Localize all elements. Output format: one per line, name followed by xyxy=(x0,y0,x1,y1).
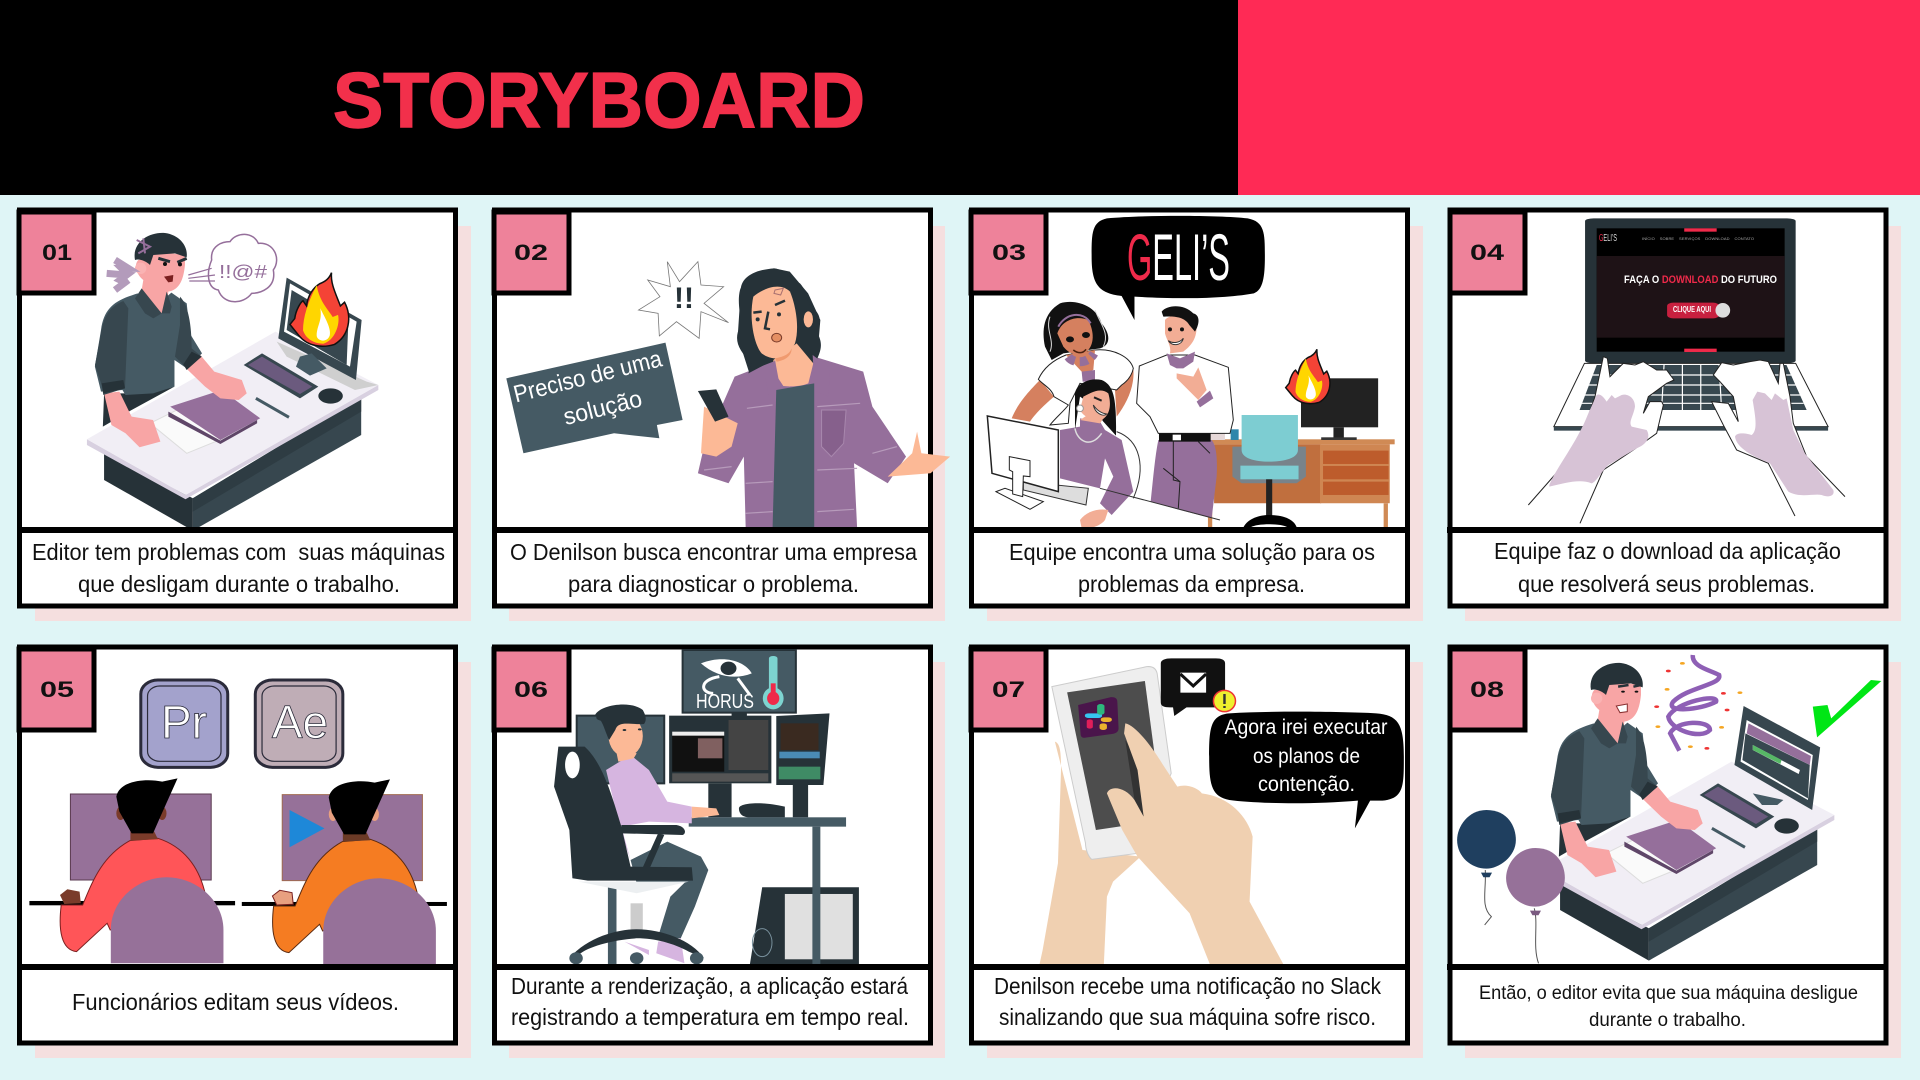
panel shadow xyxy=(987,226,1423,621)
speech balloon text: solução xyxy=(561,385,645,431)
header: red block xyxy=(1238,0,1920,195)
caption 03: Equipe encontra uma solução para os xyxy=(1009,539,1375,565)
logo text in speech bubble: GELI’S xyxy=(1127,220,1230,294)
icon: Premiere: Pr xyxy=(161,696,207,748)
badge 07 xyxy=(971,649,1046,730)
caption divider xyxy=(969,527,1410,533)
badge 03: 03 xyxy=(992,240,1026,265)
badge 07: 07 xyxy=(992,677,1025,702)
panel shadow xyxy=(1465,226,1901,621)
caption 06: registrando a temperatura em tempo real. xyxy=(511,1004,909,1030)
caption 04: que resolverá seus problemas. xyxy=(1518,571,1815,597)
badge 01: 01 xyxy=(42,240,72,265)
badge 03 xyxy=(971,212,1046,293)
speech balloon text xyxy=(511,345,674,441)
badge 08 xyxy=(1450,649,1525,730)
panel: 03 xyxy=(969,210,1423,621)
caption 07: sinalizando que sua máquina sofre risco. xyxy=(999,1004,1376,1030)
caption 07 xyxy=(994,973,1381,1030)
panel: 01 xyxy=(17,210,471,621)
panel frame xyxy=(972,210,1408,606)
caption divider xyxy=(492,964,933,970)
speech bubble text: contenção. xyxy=(1258,773,1355,796)
illustration: hands holding phone with notification xyxy=(1040,658,1404,964)
speech bubble text: Agora irei executar xyxy=(1224,716,1388,739)
caption 04: Equipe faz o download da aplicação xyxy=(1494,538,1841,564)
caption 06 xyxy=(511,973,909,1030)
caption 02: O Denilson busca encontrar uma empresa xyxy=(510,539,917,565)
title: STORYBOARD xyxy=(333,56,865,144)
panel: 02 xyxy=(492,210,950,621)
caption 02: para diagnosticar o problema. xyxy=(568,571,859,597)
laptop screen website: GELI’S xyxy=(1599,233,1617,244)
speech balloon text: Preciso de uma xyxy=(511,345,665,408)
caption 01: Editor tem problemas com suas máquinas xyxy=(32,539,445,565)
caption 08: Então, o editor evita que sua máquina desligue xyxy=(1479,982,1858,1004)
caption 06: Durante a renderização, a aplicação estará xyxy=(511,973,908,999)
illustration: monitor, balloons, confetti, check xyxy=(1457,655,1881,963)
exclamation burst text: !! xyxy=(674,282,694,315)
panel frame xyxy=(494,210,930,606)
caption 01 xyxy=(32,539,445,597)
panel: 06 xyxy=(492,647,945,1058)
illustration: hands on laptop xyxy=(1528,218,1845,523)
caption divider xyxy=(492,527,933,533)
caption 05: Funcionários editam seus vídeos. xyxy=(72,989,399,1015)
caption 03 xyxy=(1009,539,1375,597)
badge 05: 05 xyxy=(40,677,74,702)
illustration: Denilson with phone xyxy=(506,262,950,527)
logo text: Horus: HORUS xyxy=(696,691,754,713)
panel: 08 xyxy=(1447,647,1901,1058)
badge 02: 02 xyxy=(514,240,548,265)
caption divider xyxy=(17,964,458,970)
panel frame xyxy=(1450,210,1886,606)
panel shadow xyxy=(35,226,471,621)
panel frame xyxy=(20,210,456,606)
panel frame xyxy=(20,647,456,1043)
laptop screen website: FAÇA O DOWNLOAD DO FUTURO xyxy=(1624,274,1777,286)
panel frame xyxy=(972,647,1408,1043)
speech bubble text xyxy=(1224,716,1388,796)
panel: 07 xyxy=(969,647,1423,1058)
caption 04 xyxy=(1494,538,1841,597)
panel frame xyxy=(494,647,930,1043)
badge 02 xyxy=(494,212,569,293)
illustration: editor relaxed at desk xyxy=(1543,663,1834,961)
badge 01 xyxy=(19,212,94,293)
speech bubble text: os planos de xyxy=(1253,745,1360,768)
panel shadow xyxy=(1465,662,1901,1058)
illustration: two employees editing xyxy=(29,680,447,964)
caption divider xyxy=(17,527,458,533)
caption divider xyxy=(969,964,1410,970)
header: black band xyxy=(0,0,1238,195)
illustration: person at workstation xyxy=(554,650,859,964)
badge 05 xyxy=(19,649,94,730)
caption 03: problemas da empresa. xyxy=(1078,571,1305,597)
caption 07: Denilson recebe uma notificação no Slack xyxy=(994,973,1381,999)
icon: After Effects: Ae xyxy=(272,696,328,748)
panel shadow xyxy=(509,662,945,1058)
caption 01: que desligam durante o trabalho. xyxy=(78,571,400,597)
illustration: editor at desk with burning monitor xyxy=(87,233,378,531)
caption 02 xyxy=(510,539,917,597)
caption divider xyxy=(1447,527,1888,533)
panel shadow xyxy=(509,226,945,621)
badge 08: 08 xyxy=(1470,677,1504,702)
badge 04 xyxy=(1450,212,1525,293)
illustration: team around a desk xyxy=(987,216,1395,529)
caption 08 xyxy=(1479,982,1858,1031)
badge 04: 04 xyxy=(1470,240,1505,265)
badge 06 xyxy=(494,649,569,730)
caption divider xyxy=(1447,964,1888,970)
panel: 04 xyxy=(1447,210,1901,621)
panel: 05 xyxy=(17,647,471,1058)
laptop screen website xyxy=(1599,233,1777,314)
laptop screen website: INÍCIO SOBRE SERVIÇOS DOWNLOAD CONTATO xyxy=(1642,236,1754,241)
caption 08: durante o trabalho. xyxy=(1589,1009,1746,1031)
panel shadow xyxy=(35,662,471,1058)
laptop screen website: CLIQUE AQUI xyxy=(1673,305,1711,314)
panel frame xyxy=(1450,647,1886,1043)
panel shadow xyxy=(987,662,1423,1058)
thought bubble symbols: !!@# xyxy=(219,262,267,282)
badge 06: 06 xyxy=(514,677,548,702)
